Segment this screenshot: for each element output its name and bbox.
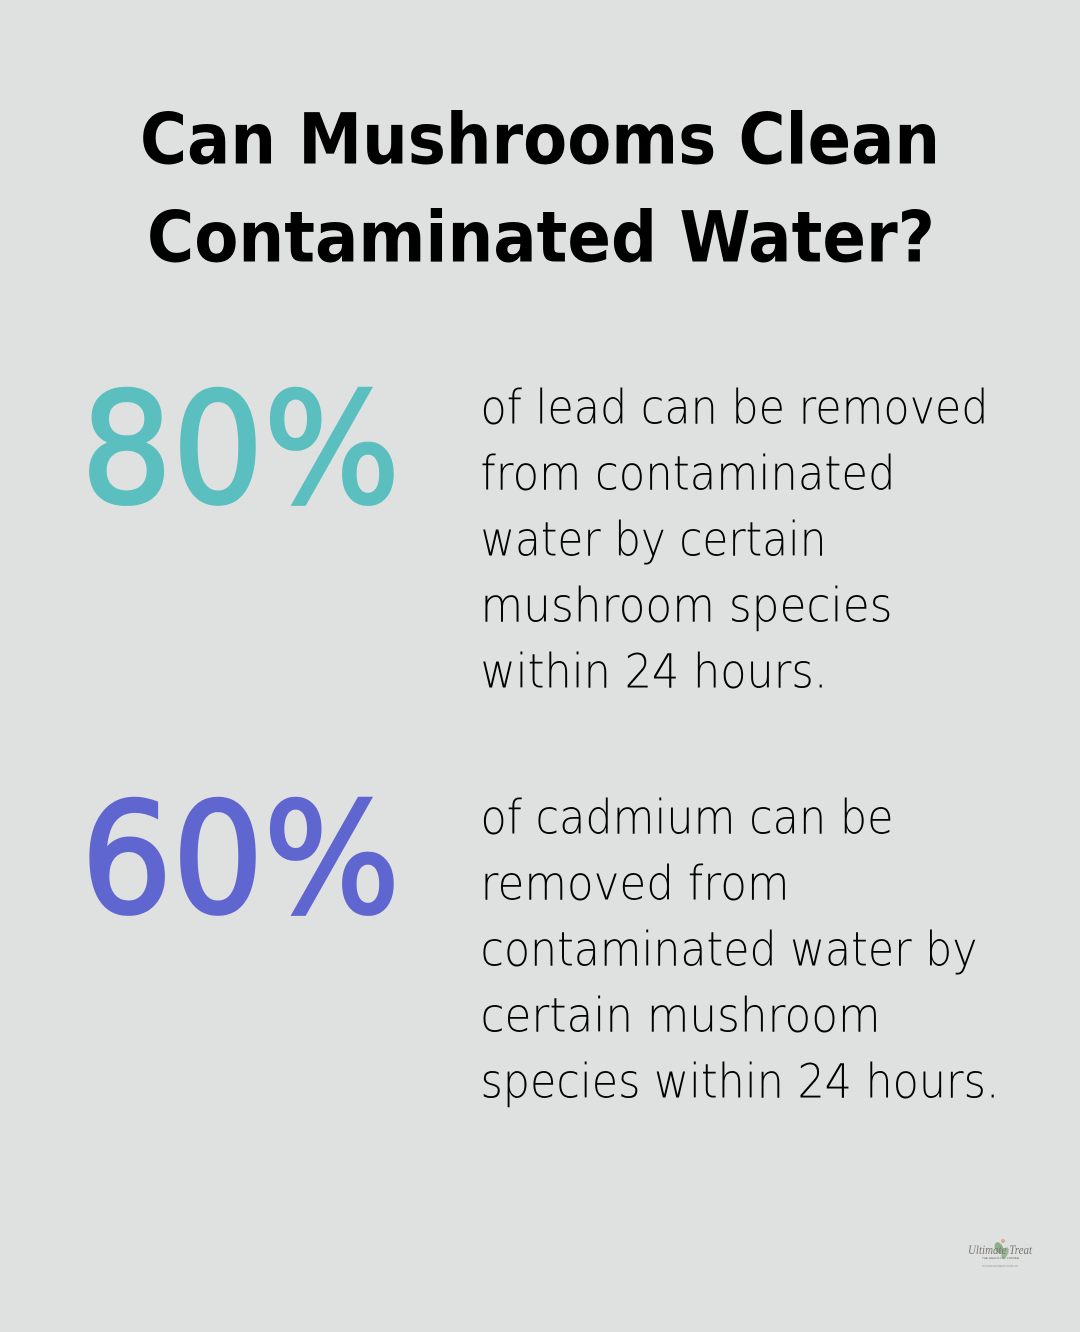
stat description: lead: mushroom species: [480, 578, 892, 634]
title: [140, 98, 940, 278]
stat description: cadmium: species within 24 hours.: [480, 1054, 1000, 1110]
title: Can Mushrooms Clean: [140, 98, 940, 180]
stat description: cadmium: contaminated water by: [480, 922, 978, 978]
stat description: cadmium: of cadmium can be: [480, 790, 894, 846]
stat description: lead: within 24 hours.: [480, 644, 828, 700]
stat description: lead: [480, 380, 988, 700]
icon: leaves: [993, 1239, 1010, 1260]
stat description: cadmium: removed from: [480, 856, 790, 912]
stat number: 60%: 60%: [81, 771, 400, 949]
title: Contaminated Water?: [147, 196, 935, 278]
stat: 60% cadmium: [81, 771, 1000, 1110]
logo: Ultimate Treat: [968, 1239, 1032, 1268]
stat description: cadmium: certain mushroom: [480, 988, 880, 1044]
stat description: lead: from contaminated: [480, 446, 896, 502]
logo: Ultimate Treat: Ultimate Treat: [968, 1242, 1032, 1257]
logo: Ultimate Treat: THE HEALTH OF COFFEE: [982, 1256, 1019, 1260]
stat description: lead: water by certain: [480, 512, 826, 568]
stat description: lead: of lead can be removed: [480, 380, 988, 436]
logo: Ultimate Treat: ULTIMATETREAT.COM.AU: [982, 1264, 1018, 1268]
stat description: cadmium: [480, 790, 1000, 1110]
stat: 80% lead: [81, 361, 988, 700]
stat number: 80%: 80%: [81, 361, 400, 539]
